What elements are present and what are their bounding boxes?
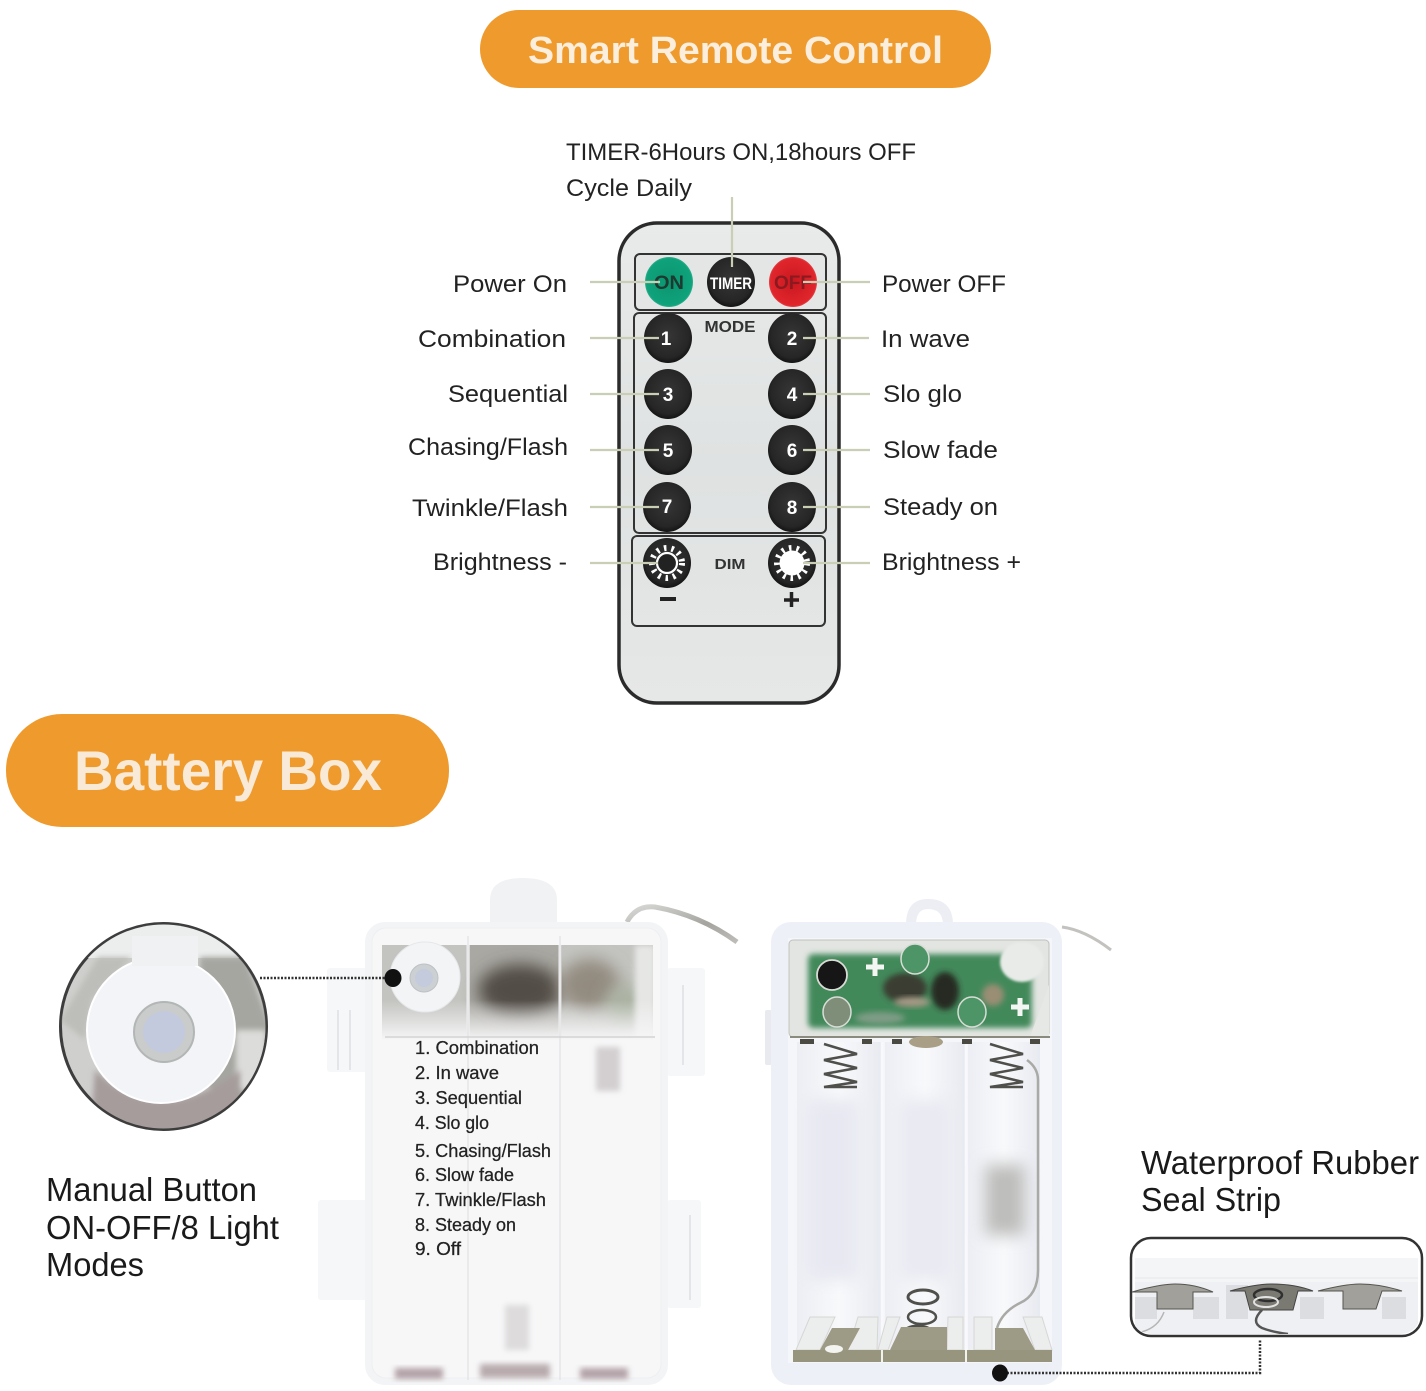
timer description text: TIMER-6Hours ON,18hours OFF (566, 139, 916, 166)
button: TIMER (707, 257, 755, 307)
button: OFF (769, 257, 817, 307)
mode list: 3. Sequential (415, 1088, 522, 1108)
text: waterproof seal caption: Seal Strip (1141, 1181, 1281, 1218)
button 5 (644, 425, 692, 475)
side clips (318, 968, 705, 1308)
inset: rubber seal strip detail (1131, 1238, 1422, 1338)
button 8: 8 (787, 498, 797, 519)
button: OFF: OFF (774, 273, 812, 294)
circuit board (789, 940, 1049, 1037)
button: brightness plus (768, 538, 816, 588)
mode list: 4. Slo glo (415, 1113, 489, 1133)
text: waterproof seal caption: Waterproof Rubber (1141, 1144, 1419, 1181)
mode list: 5. Chasing/Flash (415, 1141, 551, 1161)
button 3: 3 (663, 385, 673, 406)
heading: Battery Box: Battery Box (74, 739, 382, 802)
right labels: Steady on (883, 494, 998, 521)
mode list: 9. Off (415, 1239, 462, 1259)
right labels (881, 271, 1021, 576)
button 4 (768, 369, 816, 419)
left labels: Sequential (448, 381, 568, 408)
mode list: 2. In wave (415, 1063, 499, 1083)
mode list (415, 1038, 551, 1259)
left labels: Brightness - (433, 549, 567, 576)
text: manual button caption: ON-OFF/8 Light (46, 1209, 279, 1246)
mode list: 7. Twinkle/Flash (415, 1190, 546, 1210)
callout: seal strip pointer (992, 1340, 1260, 1382)
right labels: Brightness + (882, 549, 1021, 576)
frosted dark interior (382, 945, 655, 1040)
side latch (765, 1010, 772, 1065)
button 5: 5 (663, 441, 674, 462)
timer description text (566, 139, 916, 202)
text: waterproof seal caption (1141, 1144, 1419, 1218)
left labels (408, 271, 568, 576)
button 4: 4 (787, 385, 798, 406)
bottom metal contacts (793, 1317, 1052, 1362)
mode list: 1. Combination (415, 1038, 539, 1058)
left labels: Power On (453, 271, 567, 298)
heading: Battery Box (6, 714, 449, 827)
heading: Smart Remote Control (480, 10, 991, 88)
right labels: Slow fade (883, 437, 998, 464)
button: TIMER: TIMER (710, 274, 752, 293)
button: ON (645, 257, 693, 307)
push button on box (390, 942, 460, 1012)
right labels: In wave (881, 326, 970, 353)
heading: Smart Remote Control: Smart Remote Control (528, 30, 943, 72)
text: manual button caption (46, 1171, 279, 1283)
button 1 (644, 313, 692, 363)
left labels: Combination (418, 326, 566, 353)
dim button group: DIM (714, 556, 746, 573)
dim button group (632, 536, 825, 626)
timer description text: Cycle Daily (566, 175, 692, 202)
hanging tab (906, 899, 953, 925)
right labels: Power OFF (882, 271, 1006, 298)
battery compartments (790, 1036, 1050, 1360)
button 3 (644, 369, 692, 419)
button 6 (768, 425, 816, 475)
power button group (635, 254, 826, 310)
wire (1062, 927, 1111, 950)
button 6: 6 (787, 441, 797, 462)
callout: manual button pointer (260, 969, 402, 987)
wire (627, 907, 737, 942)
text: manual button caption: Modes (46, 1246, 144, 1283)
left labels: Chasing/Flash (408, 434, 568, 461)
mode list: 8. Steady on (415, 1215, 516, 1235)
text: manual button caption: Manual Button (46, 1171, 257, 1208)
hanging tab (490, 878, 557, 925)
connecting wire (997, 1060, 1038, 1328)
mode list: 6. Slow fade (415, 1165, 514, 1185)
button 2 (768, 313, 816, 363)
button: ON: ON (654, 273, 684, 294)
mode button group (634, 313, 826, 533)
button 2: 2 (787, 329, 797, 350)
button: brightness minus (643, 538, 691, 588)
springs (824, 1044, 1023, 1350)
battery box: closed front (318, 878, 737, 1385)
battery box: open interior (765, 899, 1111, 1385)
mode button group: MODE (704, 319, 756, 336)
button 1: 1 (661, 329, 672, 350)
left labels: Twinkle/Flash (412, 495, 568, 522)
remote control (619, 223, 839, 703)
magnified manual button (59, 922, 268, 1131)
button 7 (643, 482, 691, 532)
button 8 (768, 482, 816, 532)
button 7: 7 (662, 497, 672, 518)
leader lines (590, 197, 870, 563)
right labels: Slo glo (883, 381, 962, 408)
